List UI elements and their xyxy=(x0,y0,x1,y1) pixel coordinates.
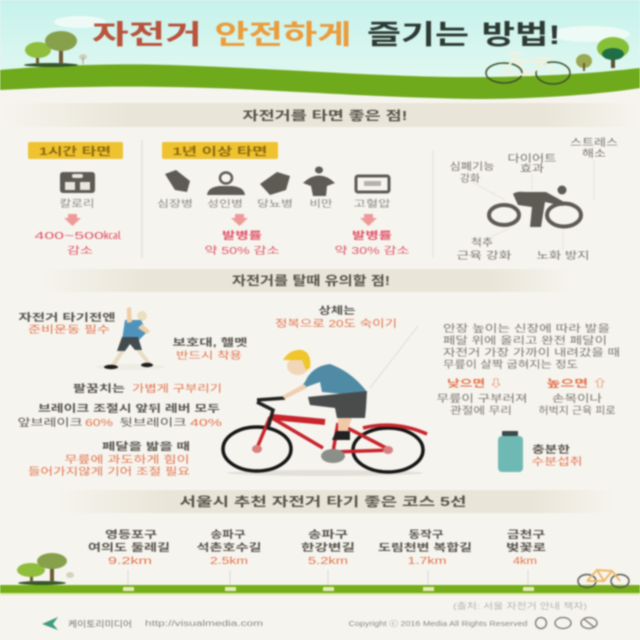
icon: trees left xyxy=(24,31,87,67)
text: disease labels: 비만 xyxy=(310,199,333,210)
divider: right xyxy=(432,150,434,258)
icon: bicycle on road xyxy=(578,570,629,588)
title xyxy=(92,20,560,50)
title: 안전하게 xyxy=(214,20,352,50)
course: Yeongdeungpo: 영등포구 xyxy=(105,528,157,541)
text: result fifty percent: 발병률 xyxy=(222,229,262,242)
section heading: benefits xyxy=(0,103,640,127)
text: saddle too low xyxy=(436,377,528,417)
text: brake: 40% xyxy=(190,418,222,429)
text: benefit labels: 다이어트 xyxy=(508,153,556,165)
title: 자전거 xyxy=(92,20,202,50)
course: Hangang road xyxy=(301,529,355,591)
text: warm up: 준비운동 필수 xyxy=(28,324,110,336)
text: result thirty percent: 약 30% 감소 xyxy=(334,245,410,257)
text: benefit labels: 노화 방지 xyxy=(536,250,590,262)
text: benefit labels xyxy=(450,137,618,262)
text: brake: 앞브레이크 xyxy=(18,417,82,429)
footer logo: 케이토리미디어 xyxy=(68,619,132,629)
header banner xyxy=(0,0,640,99)
text: brake: 브레이크 조절시 앞뒤 레버 모두 xyxy=(38,402,220,415)
illustration: stretching person xyxy=(95,307,165,370)
text: upper body: 상체는 xyxy=(318,304,356,317)
course: Dorimcheon: 동작구 xyxy=(408,529,444,541)
text: warm up xyxy=(18,311,116,336)
text: brake xyxy=(18,402,222,429)
course: Seokchon lake xyxy=(196,529,262,591)
text: warm up: 자전거 타기전엔 xyxy=(18,311,116,324)
text: brake: 뒷브레이크 xyxy=(120,416,186,429)
text: calories: 칼로리 xyxy=(60,197,94,210)
course: Seokchon lake: 송파구 xyxy=(210,529,246,541)
text: disease labels: 성인병 xyxy=(207,199,243,210)
arrow: down two xyxy=(360,214,377,226)
course: Dorimcheon xyxy=(378,529,472,591)
footer copyright: Copyright ⓒ 2016 Media All Rights Reserved xyxy=(348,620,528,628)
icons: creative commons xyxy=(536,618,597,628)
title: 방법! xyxy=(482,20,560,50)
section heading: cautions xyxy=(40,269,570,292)
panel: benefits one year xyxy=(157,142,410,257)
text: saddle height guide: 안장 높이는 신장에 따라 발을 xyxy=(443,323,610,335)
text: pedal: 들어가지않게 기어 조절 필요 xyxy=(28,465,190,478)
text: saddle height guide: 무릎이 살짝 굽혀지는 정도 xyxy=(443,359,578,371)
text: calorie result: 400~500㎉ xyxy=(34,230,122,242)
icon: obese body xyxy=(303,166,335,196)
icon: blood pressure monitor xyxy=(356,176,389,192)
course: Yeongdeungpo: 여의도 둘레길 xyxy=(88,541,170,554)
text: hydration xyxy=(532,443,582,468)
course: Hangang road: 5.2km xyxy=(308,556,348,567)
text: saddle too high xyxy=(538,377,616,417)
text: result fifty percent: 약 50% 감소 xyxy=(204,245,280,257)
icon: bicycle in banner xyxy=(486,53,570,84)
badge: one year xyxy=(162,142,278,159)
course: Yeongdeungpo xyxy=(88,528,170,591)
course: Dorimcheon: 1.7km xyxy=(408,556,446,567)
text: benefit labels: 강화 xyxy=(460,173,480,185)
course: Geumcheon xyxy=(506,528,546,591)
text: pedal: 무릎에 과도하게 힘이 xyxy=(64,453,190,466)
title: 즐기는 xyxy=(367,20,469,50)
icon: person xyxy=(207,172,245,195)
text: result thirty percent xyxy=(334,229,410,257)
footer logo: http://visualmedia.com xyxy=(145,619,263,628)
text: benefit labels: 근육 강화 xyxy=(456,250,512,262)
icon: water bottle xyxy=(498,431,523,472)
text: benefit labels: 효과 xyxy=(520,163,544,175)
rider xyxy=(282,350,367,440)
text: disease labels xyxy=(157,198,391,210)
icon: cyclist xyxy=(489,186,581,227)
text: calorie result: 감소 xyxy=(67,245,93,257)
badge: one hour: 1시간 타면 xyxy=(39,145,111,158)
icon: tree and bush right xyxy=(576,37,629,71)
divider: left xyxy=(141,140,143,258)
course: Hangang road: 송파구 xyxy=(308,529,348,541)
text: disease labels: 고혈압 xyxy=(354,198,391,210)
text: saddle too high: 손목이나 xyxy=(552,393,602,405)
text: result thirty percent: 발병률 xyxy=(352,229,392,242)
badge: one year: 1년 이상 타면 xyxy=(172,144,268,158)
text: calorie result xyxy=(34,230,122,257)
text: brake: 60% xyxy=(85,418,113,429)
timeline: green road xyxy=(0,585,640,595)
text: saddle height guide: 페달 위에 올리고 완전 페달이 xyxy=(443,334,607,347)
panel: cyclist benefits xyxy=(450,137,618,262)
text: hydration: 수분섭취 xyxy=(532,456,582,468)
course: Geumcheon: 4km xyxy=(513,556,537,567)
text: benefit labels: 해소 xyxy=(582,147,606,160)
course: Hangang road: 한강변길 xyxy=(301,541,355,554)
section heading: benefits: 자전거를 타면 좋은 점! xyxy=(242,108,408,123)
text: source note: (출처: 서울 자전거 안내 책자) xyxy=(453,601,587,611)
icon: trees on road xyxy=(17,553,74,585)
section heading: courses: 서울시 추천 자전거 타기 좋은 코스 5선 xyxy=(180,494,466,509)
course: Geumcheon: 벚꽃로 xyxy=(506,541,546,554)
text: hydration: 충분한 xyxy=(532,443,570,456)
text: handlebar: 팔꿈치는 xyxy=(73,383,125,395)
text: benefit labels: 척추 xyxy=(471,237,493,249)
bicycle xyxy=(223,398,427,472)
text: pedal: 페달을 밟을 때 xyxy=(102,440,190,453)
course: Geumcheon: 금천구 xyxy=(507,528,545,541)
text: disease labels: 심장병 xyxy=(157,199,193,210)
text: benefit labels: 스트레스 xyxy=(570,137,618,149)
text: saddle too low: 낮으면 ⇩ xyxy=(447,377,503,390)
text: handlebar: 가볍게 구부리기 xyxy=(132,383,222,395)
course: Yeongdeungpo: 9.2km xyxy=(108,556,152,567)
arrow: down one xyxy=(231,214,248,226)
panel: benefits one hour xyxy=(28,142,123,257)
text: saddle height guide xyxy=(443,323,620,371)
lines: cyclist connectors xyxy=(472,160,594,250)
text: saddle too high: 허벅지 근육 피로 xyxy=(538,405,616,417)
text: saddle too high: 높으면 ⇧ xyxy=(546,377,608,390)
footer logo xyxy=(42,617,263,630)
course: Seokchon lake: 석촌호수길 xyxy=(196,541,262,554)
text: saddle too low: 관절에 무리 xyxy=(450,404,512,417)
icon: blood drop xyxy=(260,172,290,195)
text: result fifty percent xyxy=(204,229,280,257)
text: protective gear xyxy=(172,336,248,362)
text: protective gear: 보호대, 헬멧 xyxy=(172,336,248,349)
section heading: cautions: 자전거를 탈때 유의할 점! xyxy=(232,273,390,288)
text: disease labels: 당뇨병 xyxy=(257,199,293,210)
course: Seokchon lake: 2.5km xyxy=(210,556,248,567)
text: upper body: 정복으로 20도 숙이기 xyxy=(275,318,397,330)
text: protective gear: 반드시 착용 xyxy=(176,350,242,362)
text: saddle too low: 무릎이 구부러져 xyxy=(436,393,528,405)
text: saddle height guide: 자전거 가장 가까이 내려갔을 때 xyxy=(443,347,620,359)
icon: scale xyxy=(60,172,95,193)
text: upper body xyxy=(275,304,397,330)
section heading: courses xyxy=(55,490,615,513)
text: pedal xyxy=(28,440,190,478)
course: Dorimcheon: 도림천변 복합길 xyxy=(378,541,472,554)
text: handlebar xyxy=(73,383,222,395)
icon: heart xyxy=(165,170,190,192)
illustration: rider on red bicycle xyxy=(223,326,427,476)
text: benefit labels: 심폐기능 xyxy=(450,161,494,173)
arrow: down xyxy=(64,214,81,226)
